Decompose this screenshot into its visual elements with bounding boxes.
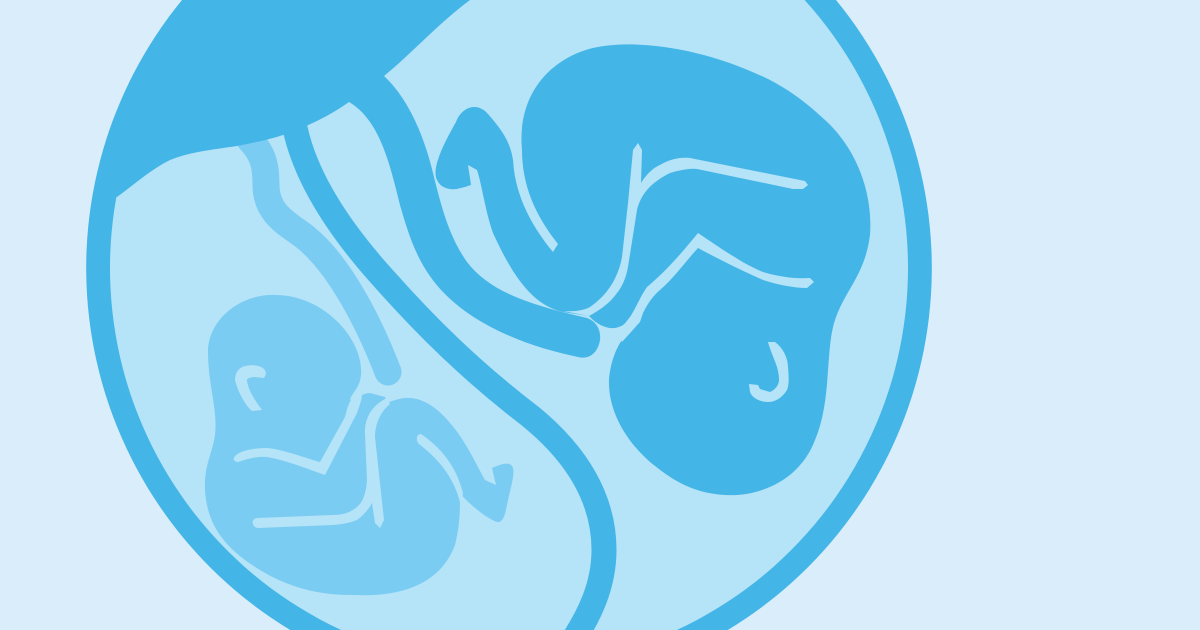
womb circle outer ring bbox=[86, 0, 932, 630]
lower fetus bbox=[205, 295, 513, 595]
lower fetus leg line bbox=[253, 398, 390, 528]
upper fetus thigh line bbox=[563, 143, 808, 316]
lower fetus ear bbox=[235, 365, 266, 411]
dark umbilical cord bbox=[349, 76, 600, 358]
lower fetus body bbox=[205, 295, 513, 595]
upper fetus leg line bbox=[618, 233, 814, 342]
upper fetus ear bbox=[749, 342, 789, 402]
light umbilical cord bbox=[250, 140, 388, 372]
lower fetus arm line bbox=[234, 390, 362, 475]
lower fetus foot line bbox=[417, 434, 463, 506]
membrane between sacs bbox=[295, 128, 604, 630]
placenta bbox=[111, 0, 470, 197]
upper fetus arm line bbox=[513, 150, 558, 252]
upper fetus bbox=[436, 44, 870, 495]
illustration: twins in the womb bbox=[86, 0, 932, 630]
upper fetus body bbox=[436, 44, 870, 495]
womb interior bbox=[110, 0, 908, 630]
